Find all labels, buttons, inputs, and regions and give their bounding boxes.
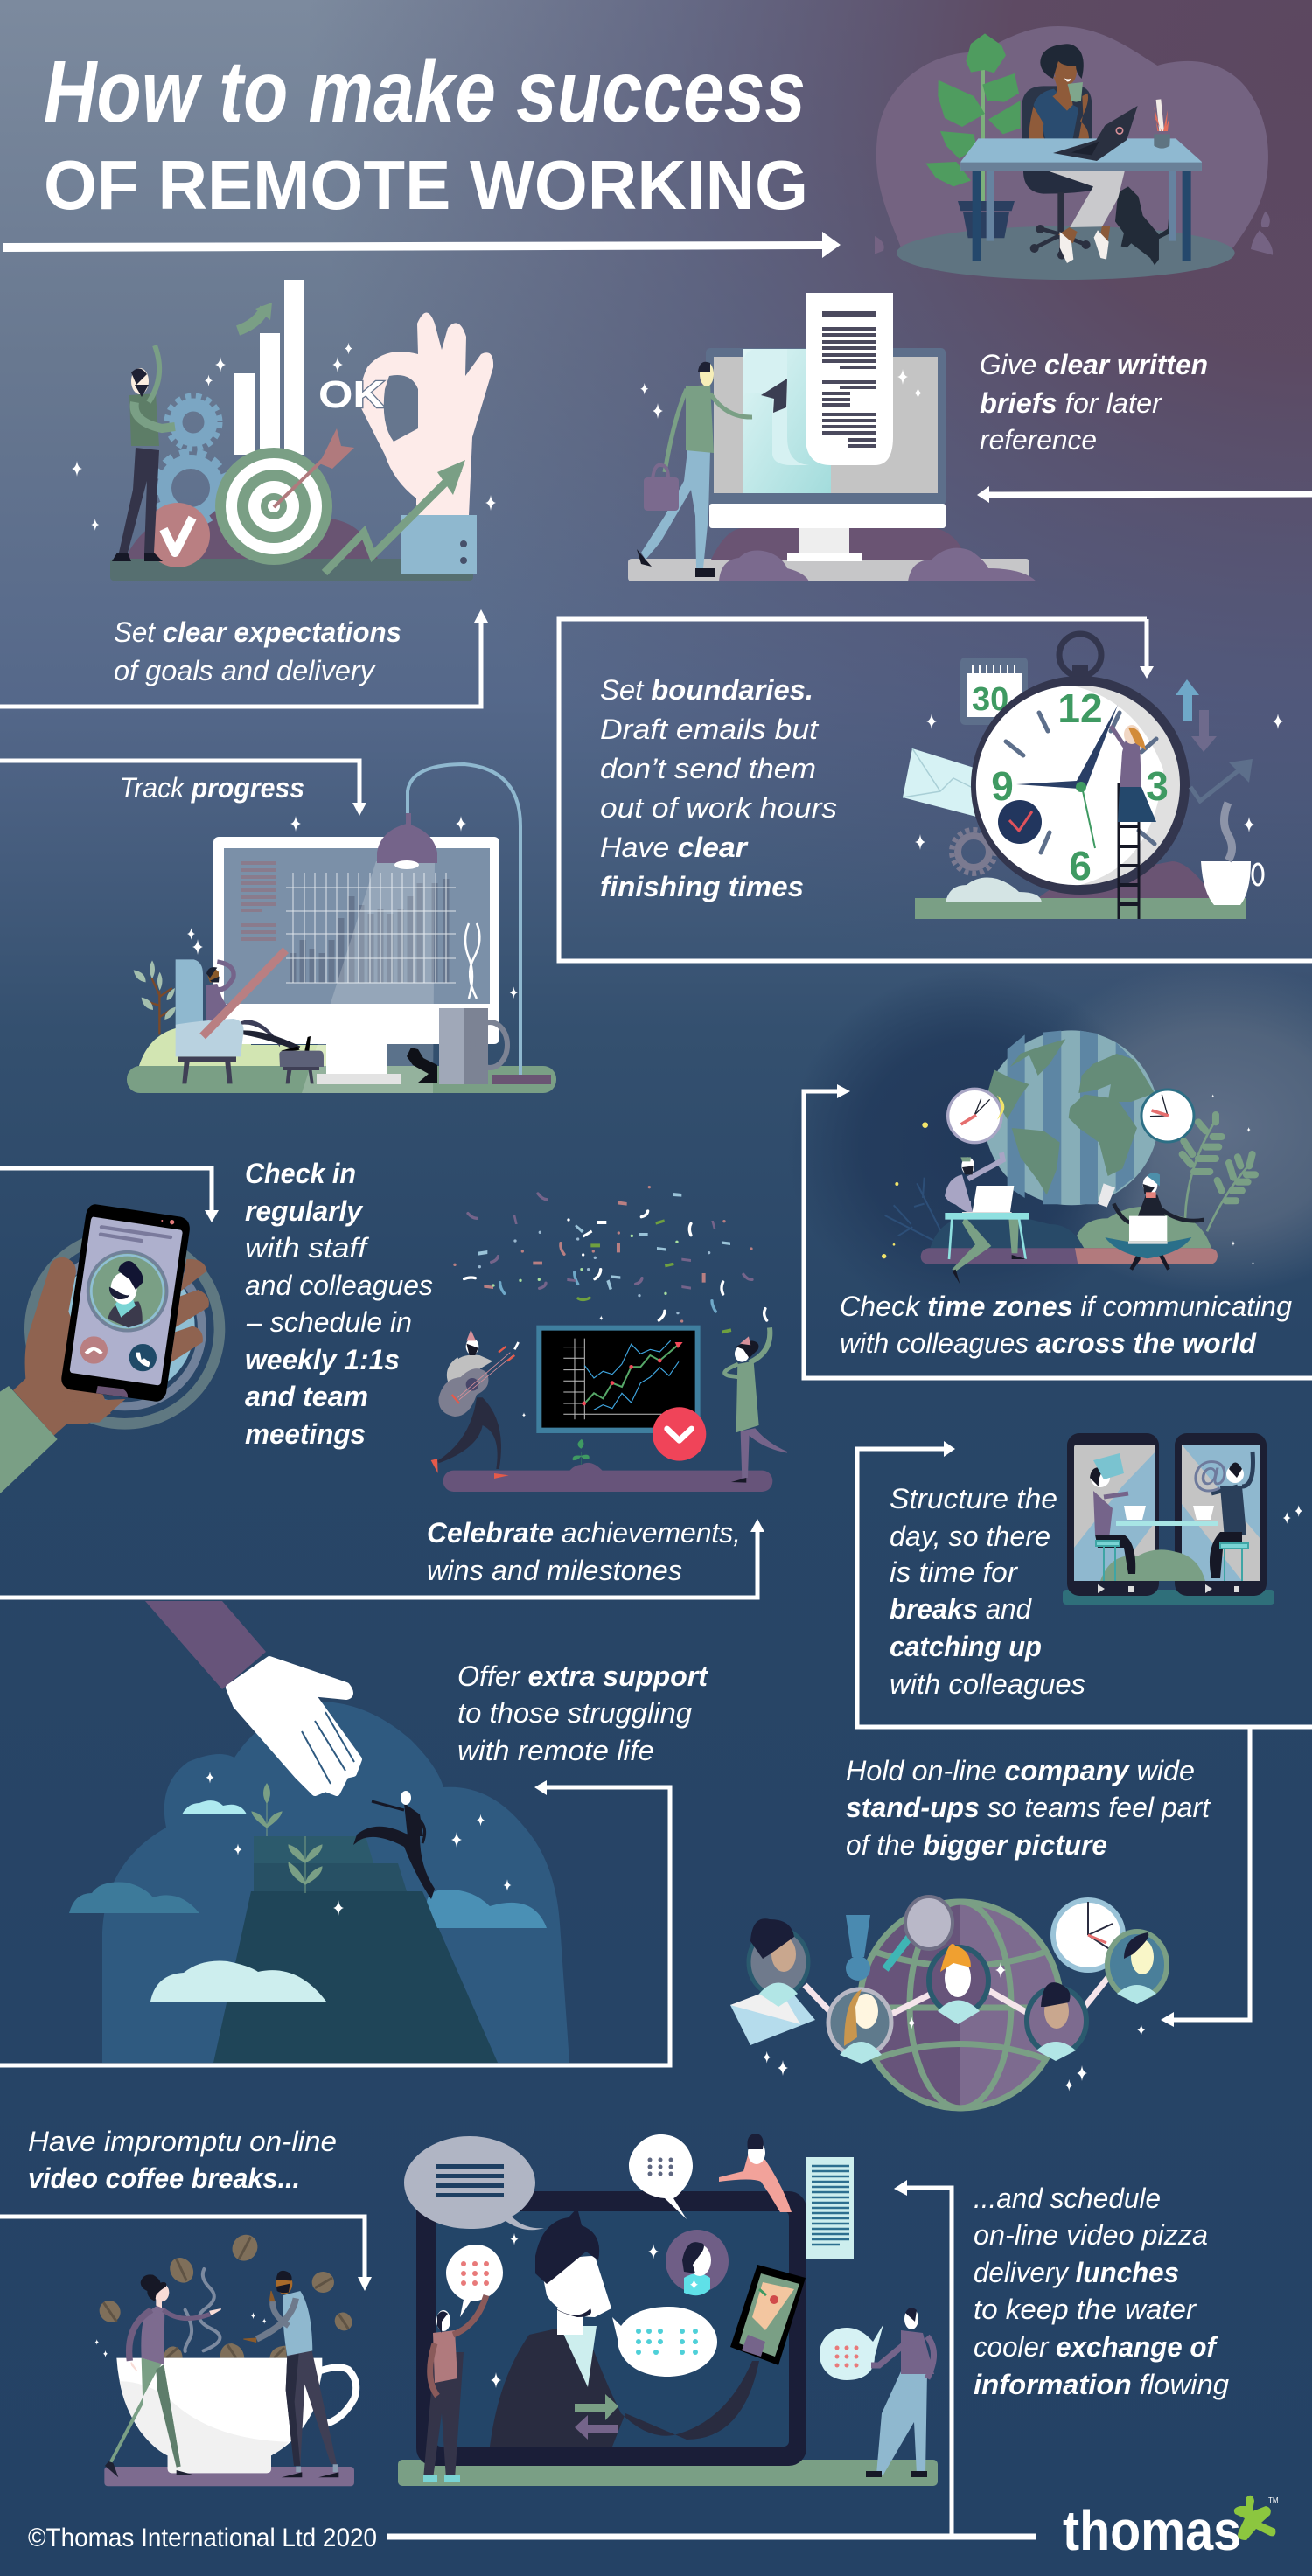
copyright: ©Thomas International Ltd 2020 [28,2524,377,2552]
text: written briefs: Give clear written [980,349,1208,380]
envelope [730,1987,815,2045]
text: extra support: to those struggling [457,1697,692,1729]
left man [423,2295,486,2482]
text: check in: weekly 1:1s [245,1344,400,1375]
illustration: time zones [882,1030,1255,1284]
exclamation mark [846,1915,870,1981]
text: boundaries [600,674,837,902]
document scroll [743,293,893,493]
text: pizza lunches: ...and schedule [974,2183,1161,2214]
arrow: extra support [0,1780,670,2065]
text: extra support [457,1660,708,1766]
arrow: briefs [977,486,1312,503]
OK hole [384,375,418,442]
envelope [903,748,980,818]
gears [155,396,227,524]
glow behind globe [787,962,1312,1320]
text: coffee breaks [28,2126,337,2194]
white speech bubble top [629,2134,693,2219]
clock [1053,1900,1123,1970]
clock face: 6 [1069,843,1092,888]
right sitter [1210,1452,1253,1581]
arrow: title to header illustration [3,232,841,258]
right man [866,2308,934,2477]
branches [885,1178,940,1240]
bars [234,280,304,455]
clock face: 12 [1057,686,1103,731]
left worker [945,1152,1028,1284]
arrow: expectations [0,609,488,707]
cup handle [315,2367,356,2425]
sparkles [72,343,496,531]
clock face [971,676,1190,895]
ground [443,1439,772,1492]
text: pizza lunches: on-line video pizza [974,2219,1208,2251]
runner [353,1791,435,1899]
calendar [960,658,1028,725]
illustration: progress monitor [127,764,556,1093]
plants [1183,1115,1255,1231]
chart on screen [241,863,479,999]
ladder [1119,783,1139,919]
text: time zones [840,1291,1292,1359]
text: check in: and colleagues [245,1270,433,1301]
stopwatch knob [1059,634,1101,682]
armchair and person [176,947,324,1083]
clouds [69,1800,547,2002]
mug [439,1008,507,1084]
zigzag arrow [325,460,465,573]
logo: thomas [1063,2499,1241,2562]
text: check in: meetings [245,1418,366,1450]
text: check in: Check in [245,1158,356,1189]
illustration: network globe [730,1897,1167,2108]
confetti [453,1186,767,1333]
text: stand-ups: Hold on-line company wide [846,1755,1195,1786]
bubble: teal dots [612,2307,717,2377]
cup shade [120,2381,289,2473]
frame: time zones [804,1084,1312,1378]
text: clear expectations: Set clear expectations [114,616,401,648]
cuff [401,515,477,574]
woman on top [719,2134,792,2212]
text: structure the day: with colleagues [890,1668,1085,1700]
text: celebrate [427,1517,741,1586]
connection lines [805,1972,1113,2020]
text: time zones: with colleagues across the world [840,1327,1257,1359]
text: structure the day: day, so there [890,1521,1050,1552]
dart [274,428,354,507]
up/down arrows [1176,679,1217,752]
lamp light [302,861,435,1093]
plant [134,960,176,1034]
text: written briefs: briefs for later [980,387,1162,419]
text: stand-ups: of the bigger picture [846,1829,1107,1861]
illustration: goals and targets [0,280,496,707]
cup [116,2358,322,2473]
text: structure the day: breaks and [890,1593,1032,1625]
text: check in: and team [245,1381,368,1412]
text: time zones: Check time zones if communicating [840,1291,1292,1322]
illustration: coffee [95,2230,356,2486]
left sitter [1090,1467,1135,1581]
text: pizza lunches: to keep the water [974,2294,1197,2325]
frame: structure the day [857,1441,1312,2027]
growth arrow [238,308,265,331]
text: structure the day: catching up [890,1631,1042,1662]
title [44,43,808,224]
dancing woman [725,1327,787,1483]
text: check in: – schedule in [246,1306,412,1338]
text: written briefs [980,349,1208,456]
illustration: clock [903,634,1283,919]
grey speech bubble [404,2136,544,2230]
hand [13,1257,111,1436]
text: boundaries: don’t send them [600,753,816,784]
mounds and ground [921,1207,1218,1264]
phone [61,1204,190,1402]
calendar: 30 [972,681,1008,718]
illustration: extra support [69,1601,569,2063]
text: check in: with staff [245,1232,369,1264]
sleeve [145,1601,266,1689]
text: extra support: Offer extra support [457,1660,708,1692]
text: structure the day: Structure the [890,1483,1057,1514]
woman on ladder [1111,725,1156,822]
text: boundaries: Have clear [600,832,749,863]
mail [1093,1453,1124,1479]
OK hand [360,313,493,516]
arrow: pizza lunches [894,2180,952,2537]
avatar [88,1252,167,1331]
text: structure the day: is time for [890,1556,1018,1588]
globe [984,1030,1159,1205]
avatars [749,1918,1167,2064]
man [243,2271,338,2477]
bubble: light [820,2324,883,2380]
illustration: woman at desk [875,26,1273,280]
at sign: @ [1192,1453,1228,1494]
text: stand-ups: stand-ups so teams feel part [846,1792,1211,1823]
beans [95,2230,355,2358]
OK text: OK [318,373,385,416]
text: track progress: Track progress [120,772,304,804]
arrow: track progress [0,761,366,816]
text: stand-ups [846,1755,1211,1861]
title: How to make success [44,43,806,141]
tablet [416,2191,806,2466]
text: boundaries: Draft emails but [600,714,819,745]
arrow: check in [0,1168,219,1222]
text: pizza lunches: delivery lunches [974,2257,1179,2288]
phone with pizza [730,2265,806,2365]
gear [952,830,995,874]
cat [407,1048,437,1083]
helping hand [229,1660,359,1793]
cloud backdrop [102,1702,569,2063]
illustration: written briefs [628,293,1036,581]
text: check in [245,1158,433,1450]
text: celebrate: Celebrate achievements, [427,1517,741,1549]
avatar [666,2230,729,2295]
check badge [145,503,210,567]
person with bag [637,362,752,577]
text: coffee breaks: Have impromptu on-line [28,2126,337,2157]
text: boundaries: finishing times [600,871,804,902]
chart board [536,1326,701,1433]
text: structure the day [890,1483,1085,1700]
magnifier [885,1897,953,1969]
clocks [948,1089,1194,1143]
monitor [213,837,499,1084]
footer line [387,2534,1036,2539]
stars [882,1122,928,1258]
paper [806,2157,854,2259]
target [215,448,332,565]
coffee cup [1201,803,1263,905]
main person [490,2208,759,2447]
mountain [213,1836,498,2063]
call buttons [80,1336,157,1371]
cursor [761,379,787,413]
guitarist [431,1330,519,1479]
text: pizza lunches: information flowing [974,2369,1229,2400]
text: goals and delivery: of goals and delivery [114,655,376,686]
rings [30,1235,220,1424]
sleeve [0,1386,58,1493]
lamp [377,764,551,1084]
text: coffee breaks: video coffee breaks... [28,2162,300,2194]
ground [104,2467,354,2486]
illustration: celebration [431,1186,787,1492]
illustration: phones coffee [1063,1433,1302,1605]
frame: boundaries [559,619,1312,961]
right worker [1098,1173,1204,1270]
woman [105,2274,221,2477]
text: extra support: with remote life [457,1735,654,1766]
globe [860,1902,1061,2108]
text: pizza lunches [974,2183,1229,2400]
text: boundaries: Set boundaries. [600,674,813,706]
text: check in: regularly [245,1195,364,1227]
check badge [653,1407,706,1461]
logo: TM [1268,2496,1279,2504]
arrow: celebrate [0,1519,764,1598]
text: written briefs: reference [980,424,1097,456]
trend arrow [1190,759,1253,801]
illustration: video call [398,2134,938,2486]
title: OF REMOTE WORKING [44,146,808,224]
clock face: 3 [1146,763,1169,809]
steam [185,2269,220,2351]
plants [252,1784,322,1893]
person [112,345,175,561]
illustration: phone in hand [0,1204,220,1493]
text: celebrate: wins and milestones [427,1555,682,1586]
bubble: red dots [446,2245,503,2317]
arrow: coffee breaks [0,2217,372,2291]
text: pizza lunches: cooler exchange of [974,2331,1218,2363]
text: boundaries: out of work hours [600,792,837,824]
clock face: 9 [991,763,1014,809]
